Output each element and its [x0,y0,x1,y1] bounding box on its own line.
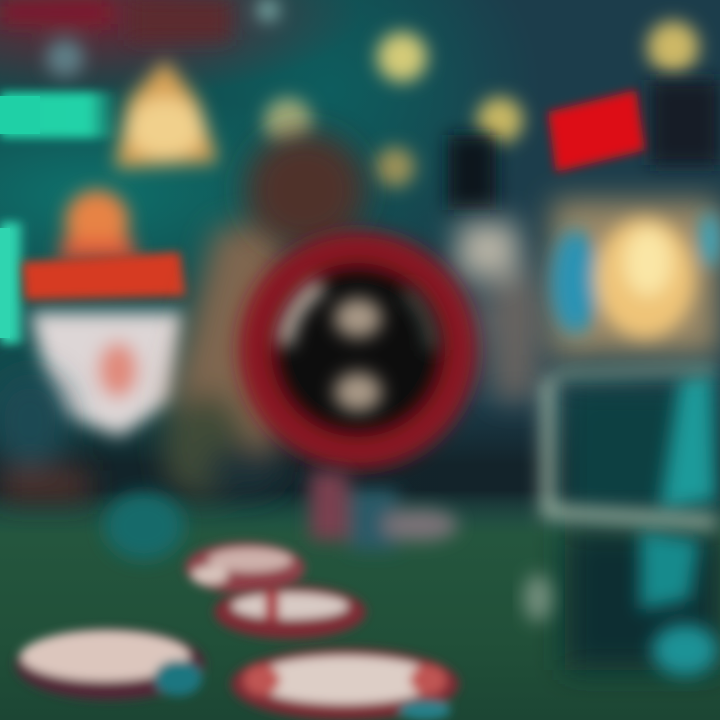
glowing mint bar [0,92,118,138]
chip: upper stack [185,542,305,594]
chip stack centre [310,472,458,550]
hanging lights: yellow dots [264,21,699,187]
red band [22,252,186,300]
left mint edge [0,222,26,344]
pale frame bars [548,368,716,522]
chip: front [231,648,459,720]
chip: left [15,628,205,700]
teal glass frame with chips [524,368,720,676]
lantern [115,60,218,168]
dark blocks [448,80,720,210]
woman: arm and hair [163,132,365,497]
colour burst panel [551,200,720,355]
ceiling: maroon pattern with lights [0,0,278,77]
chip: middle [214,585,366,639]
right pillar behind ring [458,222,535,400]
teal highlights [640,372,718,676]
teal chip on floor [104,492,184,560]
red ring emblem [255,247,461,453]
orange dome [60,190,135,260]
outer red ring [255,247,461,453]
red hat lamp [22,190,186,436]
left lower dark figures [0,372,90,500]
poker chips on floor [15,542,459,720]
inner white arc [285,285,432,350]
pale pips [334,298,382,412]
white panel [30,312,184,436]
red sign [548,90,645,172]
